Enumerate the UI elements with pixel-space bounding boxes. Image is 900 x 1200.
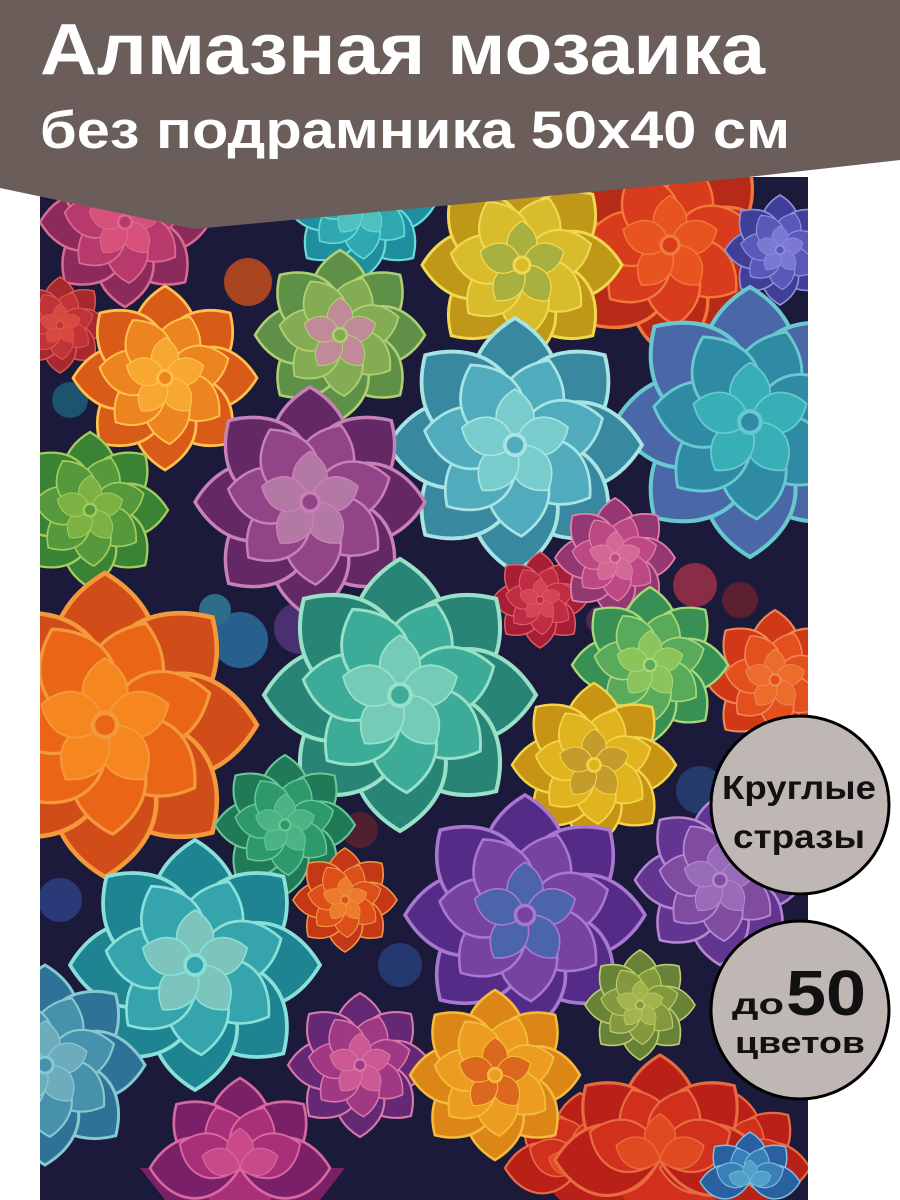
icon: teal succulent top [295, 206, 436, 274]
icon: pale blue succulent [388, 318, 642, 572]
badge: up to 50 colours: цветов [735, 1025, 865, 1060]
icon: red succulent bottom right [505, 1055, 810, 1200]
artwork: succulent mosaic picture [40, 177, 808, 1200]
icon: red succulent top right [590, 177, 754, 344]
icon: pink succulent bottom [288, 993, 432, 1137]
artwork background [40, 177, 808, 1200]
icon: yellow rose succulent [512, 683, 676, 847]
icon: teal succulent bottom left [70, 840, 320, 1090]
icon: red succulent centre [492, 552, 588, 648]
icon: large purple succulent [405, 795, 645, 1035]
background pebbles [38, 258, 758, 987]
title: Алмазная мозаика [40, 10, 766, 90]
subtitle: без подрамника 50х40 см [40, 101, 790, 160]
icon: purple succulent right [635, 795, 805, 965]
badge: round rhinestones: Круглые [722, 769, 876, 806]
header banner [0, 0, 900, 229]
icon: yellow succulent [420, 192, 624, 344]
icon: blue succulent bottom right [700, 1132, 800, 1199]
badge: up to 50 colours: 50 [786, 957, 866, 1029]
icon: red leaves left edge [40, 276, 98, 374]
badge: up to 50 colours: до [732, 988, 784, 1021]
icon: orange succulent [73, 286, 257, 470]
icon: green succulent left [40, 430, 170, 586]
icon: purple succulent [195, 387, 425, 617]
icon: blue succulent bottom left [40, 963, 147, 1167]
icon: red succulent right edge [708, 608, 808, 732]
icon: crimson succulent bottom [140, 1078, 345, 1200]
badge: round rhinestones: стразы [733, 818, 865, 855]
icon: light green succulent [572, 587, 728, 743]
icon: indigo succulent top right [724, 194, 808, 306]
icon: pink succulent centre [555, 498, 675, 618]
icon: giant orange succulent [40, 570, 260, 880]
icon: small orange red succulent [293, 848, 397, 952]
icon: crimson succulent top left [40, 200, 208, 308]
icon: green succulent with pink centre [255, 250, 425, 420]
badge: round rhinestones [711, 716, 889, 894]
icon: green star succulent [215, 755, 355, 895]
icon: teal green succulent [264, 559, 536, 831]
icon: olive leaves bottom right [585, 950, 695, 1060]
badge: up to 50 colours [711, 921, 889, 1099]
icon: orange star succulent [410, 990, 580, 1160]
icon: blue succulent right [618, 284, 808, 560]
